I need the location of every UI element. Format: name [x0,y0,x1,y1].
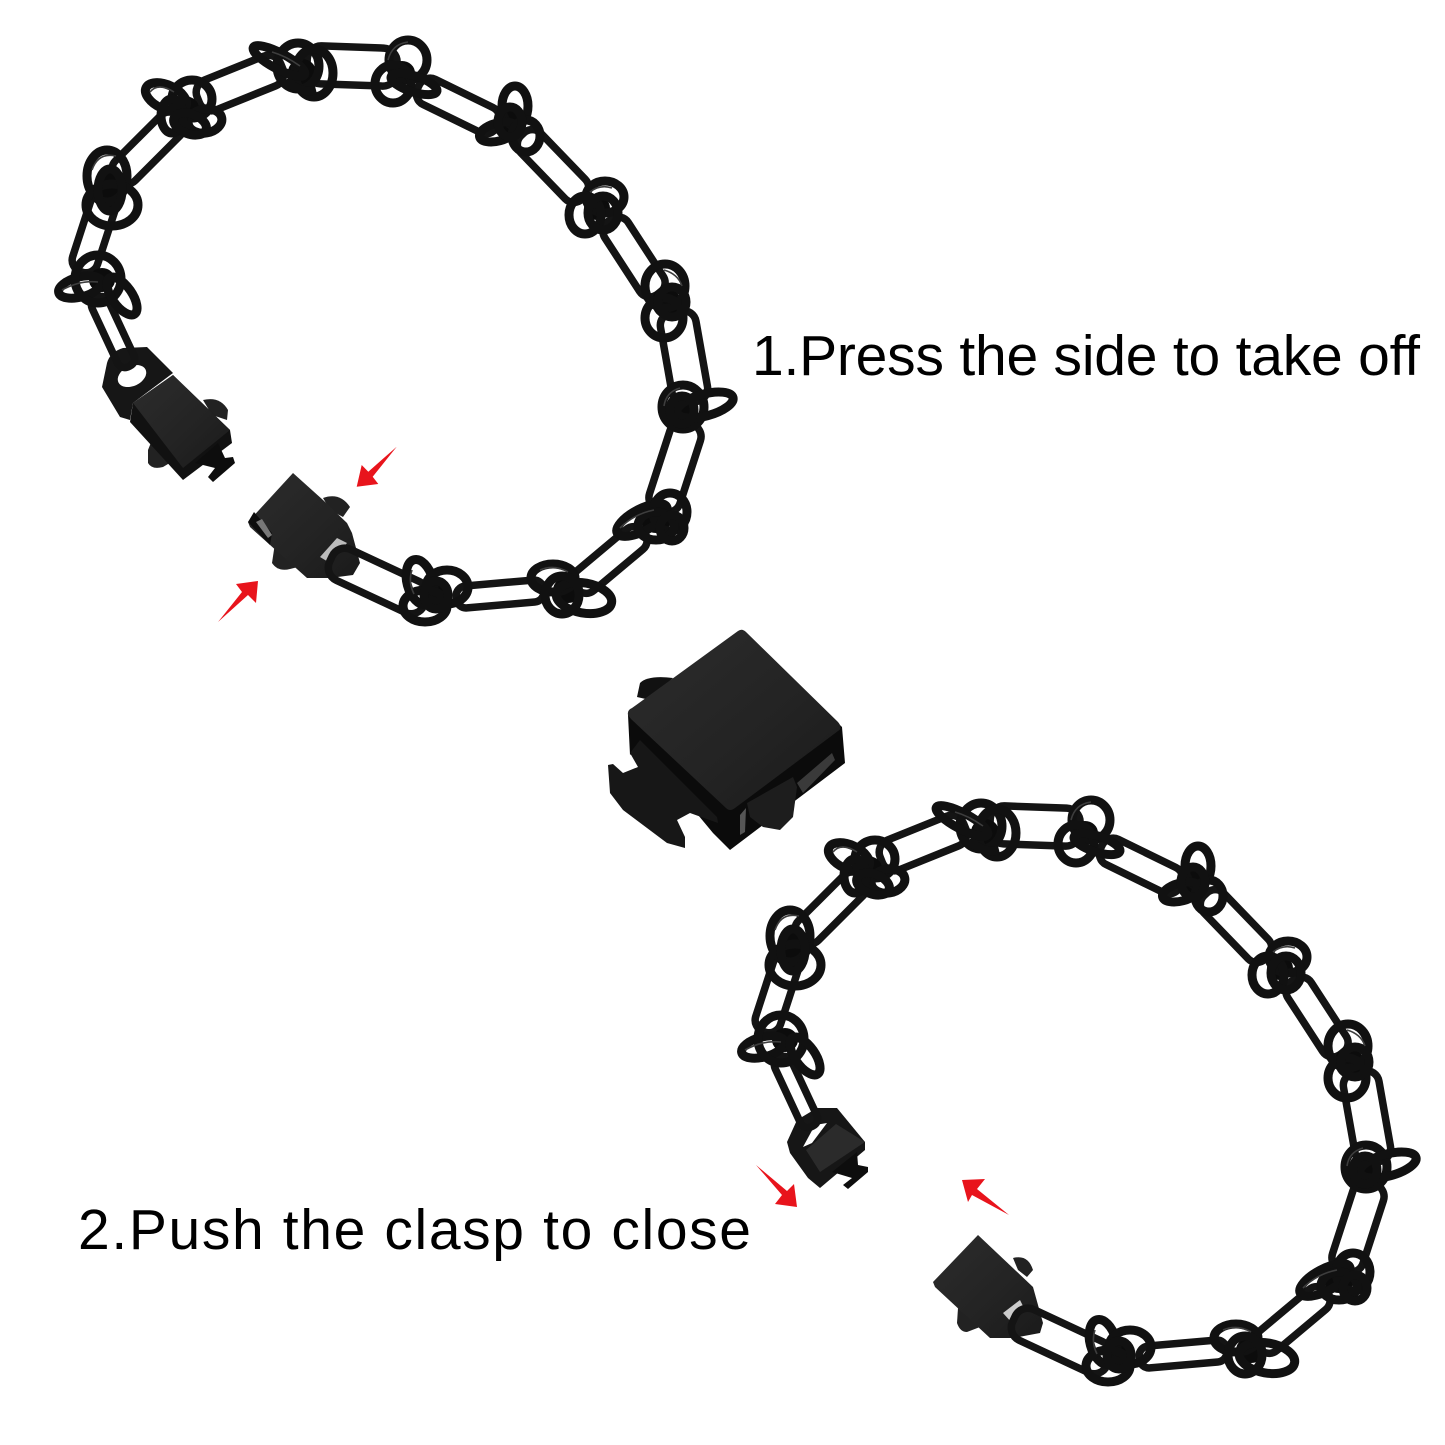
wing: bottom [747,777,797,830]
arrow: press side upper right [357,447,397,487]
arrow: press side lower left [218,581,258,622]
bottom bracelet chain [739,800,1419,1382]
step 2 label: 2.Push the clasp to close [78,1198,751,1262]
clasp body side wall [628,630,845,850]
wing: top [637,677,673,700]
clasp: bottom bracelet lower piece [933,1235,1043,1338]
clasp: bottom bracelet upper piece [787,1108,868,1189]
clasp: top bracelet lower piece [248,473,360,578]
step 1 label: 1.Press the side to take off [752,324,1420,388]
clasp: top bracelet upper piece [102,347,235,482]
clasp: centre enlarged view [608,630,845,850]
tongue [608,740,718,848]
arrow: push clasp left [756,1165,797,1207]
arrow: push clasp right [962,1179,1009,1215]
top face [628,630,840,810]
loop end [102,347,173,420]
top bracelet chain [56,40,736,622]
